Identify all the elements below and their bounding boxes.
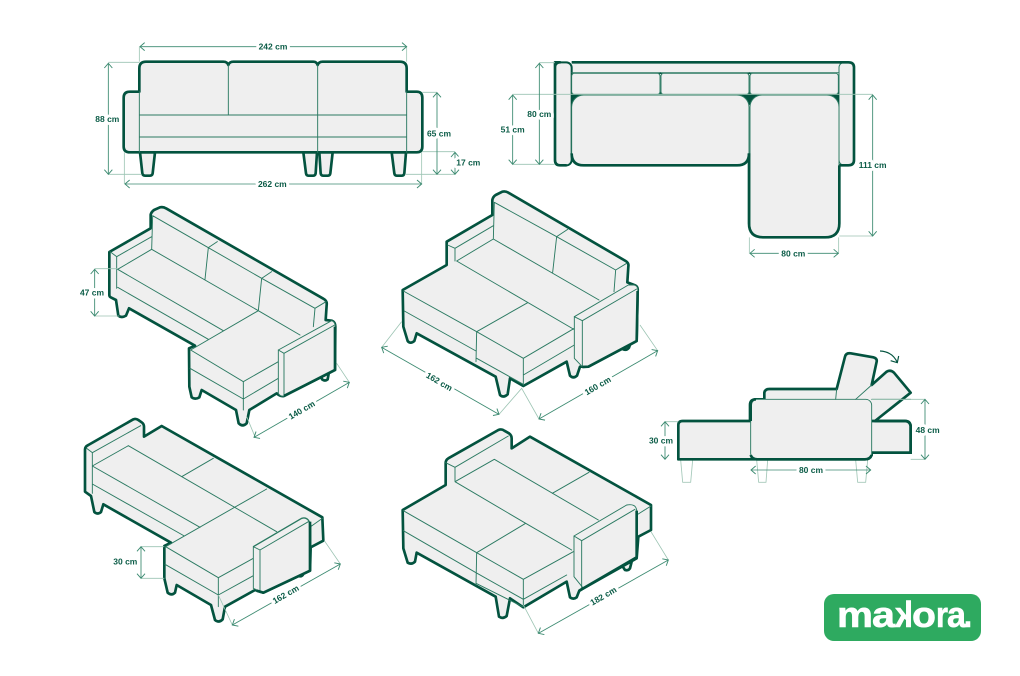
logo: makora: . [964, 594, 972, 635]
dimensions: isometric view 2: 162 cm [424, 370, 455, 393]
dimensions: top view: 80 cm [781, 248, 806, 258]
panel: isometric view footrest extended, backrest up [382, 191, 658, 419]
logo: makora: k [894, 594, 913, 635]
legs [681, 460, 868, 482]
dimensions: top view: 80 cm [527, 109, 552, 119]
dimensions: front view [95, 42, 481, 189]
panel: side view of sofa [649, 351, 940, 482]
dimensions: front view: 242 cm [259, 42, 288, 52]
arrow: backrest folds down [880, 351, 899, 363]
dimensions: isometric view 1: 47 cm [80, 287, 104, 297]
dimensions: side view: 48 cm [916, 425, 940, 435]
sofa isometric drawing [403, 191, 638, 397]
panel: top view of sofa [501, 62, 887, 258]
logo: makora: m [837, 594, 873, 635]
sofa front drawing [124, 62, 422, 176]
panel: isometric view chaise right, backrest down [85, 419, 340, 625]
panel: isometric view footrest extended, backrest down [403, 429, 668, 633]
dimensions: isometric view 4 [523, 532, 668, 633]
dimensions: isometric view 3: 162 cm [271, 583, 301, 606]
dimensions: front view: 17 cm [456, 157, 481, 167]
dimensions: side view: 80 cm [799, 465, 823, 475]
dimensions: side view [649, 399, 940, 475]
dimensions: front view: 88 cm [95, 114, 120, 124]
dimensions: front view: 65 cm [427, 128, 451, 138]
dimensions: isometric view 1 [80, 269, 349, 437]
sofa top drawing [555, 62, 854, 237]
dimensions: side view: 30 cm [649, 435, 673, 445]
dimensions: isometric view 1: 140 cm [287, 398, 317, 422]
dimensions: isometric view 4: 182 cm [588, 584, 619, 608]
logo: makora: r [936, 594, 948, 635]
logo: makora: o [912, 594, 936, 635]
sofa isometric drawing [85, 419, 323, 622]
dimensions: isometric view 2 [382, 322, 658, 419]
dimensions: top view: 111 cm [859, 160, 887, 170]
dimensions: isometric view 3 [113, 541, 340, 625]
panel: front view of sofa [95, 42, 481, 189]
sofa isometric drawing [403, 429, 651, 618]
dimensions: top view [501, 63, 887, 258]
sofa side drawing [665, 353, 925, 459]
dimensions: top view: 51 cm [501, 125, 525, 135]
sofa isometric drawing [109, 207, 335, 425]
dimensions: isometric view 3: 30 cm [113, 557, 138, 567]
logo: makora: a [872, 594, 896, 635]
dimensions: isometric view 2: 160 cm [583, 374, 613, 397]
panel: isometric view chaise right, backrest up [80, 207, 349, 437]
logo: makora [824, 594, 981, 641]
dimensions: front view: 262 cm [258, 179, 287, 189]
logo: makora: a [947, 594, 967, 635]
